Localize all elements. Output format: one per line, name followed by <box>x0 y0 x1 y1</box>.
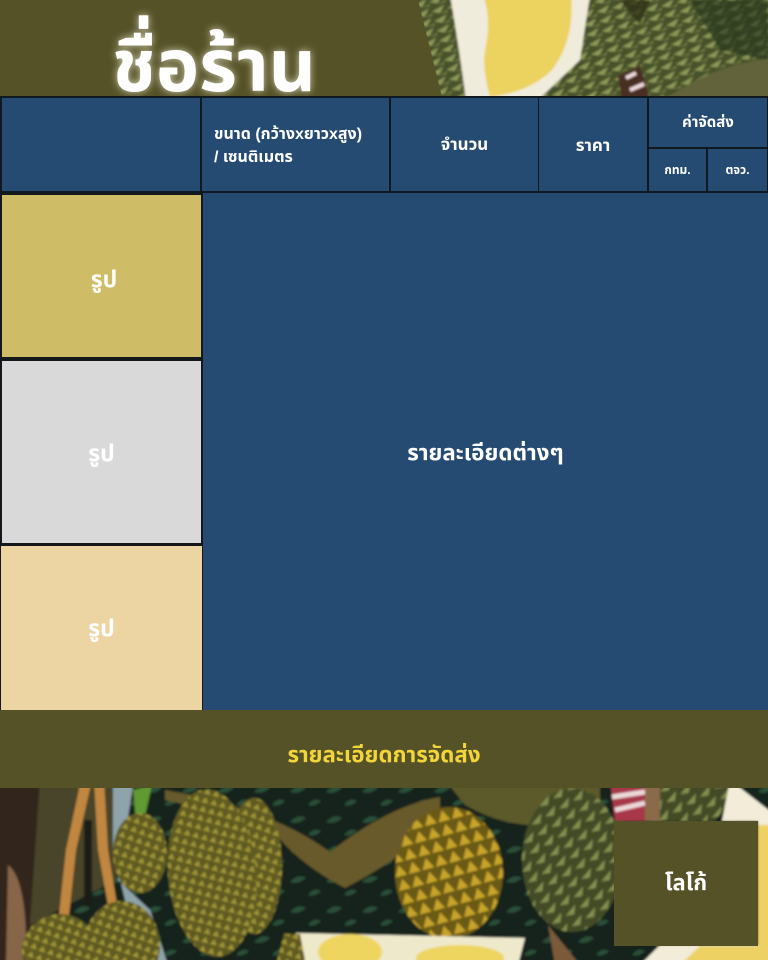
header cell: Bangkok <box>649 149 706 191</box>
image placeholder 2: รูป <box>88 440 115 466</box>
leaf <box>133 785 152 832</box>
image placeholder 3: รูป <box>88 615 115 641</box>
header cell: size: / เซนติเมตร <box>214 149 293 166</box>
header cell: Bangkok: กทม. <box>664 163 691 177</box>
image column backing <box>0 193 203 710</box>
header cell: shipping: ค่าจัดส่ง <box>682 114 734 131</box>
image placeholder 1: รูป <box>91 266 117 292</box>
title: ชื่อร้าน <box>112 26 316 107</box>
header cell: upcountry: ตจว. <box>725 163 750 177</box>
shipping details band: รายละเอียดการจัดส่ง <box>287 742 481 767</box>
image placeholder 3 <box>1 546 202 710</box>
details panel: รายละเอียดต่างๆ <box>407 440 564 464</box>
opened durian <box>296 933 525 960</box>
banner olive panel <box>408 0 442 96</box>
branches <box>165 790 440 888</box>
image placeholder 1 <box>2 195 201 357</box>
header cell: quantity <box>391 98 538 191</box>
table header <box>0 96 768 194</box>
bamboo supports <box>59 780 92 915</box>
header cell: quantity: จำนวน <box>441 135 488 154</box>
bottom photo: durian orchard <box>0 788 768 960</box>
header cell: price <box>539 98 647 191</box>
header cell: upcountry <box>708 149 767 191</box>
durians <box>113 813 167 893</box>
header cell: size <box>202 98 389 191</box>
tree trunks <box>0 780 42 960</box>
header cell: price: ราคา <box>576 136 610 154</box>
header cell: size: ขนาด (กว้างxยาวxสูง) <box>214 126 362 143</box>
shipping details band <box>0 710 768 788</box>
image placeholder 2 <box>2 361 201 543</box>
details panel <box>203 193 768 710</box>
logo box: โลโก้ <box>665 870 707 895</box>
logo box <box>614 821 758 946</box>
header cell: shipping <box>649 98 767 147</box>
top banner photo: durian <box>418 0 768 96</box>
header cell: blank <box>2 98 200 191</box>
